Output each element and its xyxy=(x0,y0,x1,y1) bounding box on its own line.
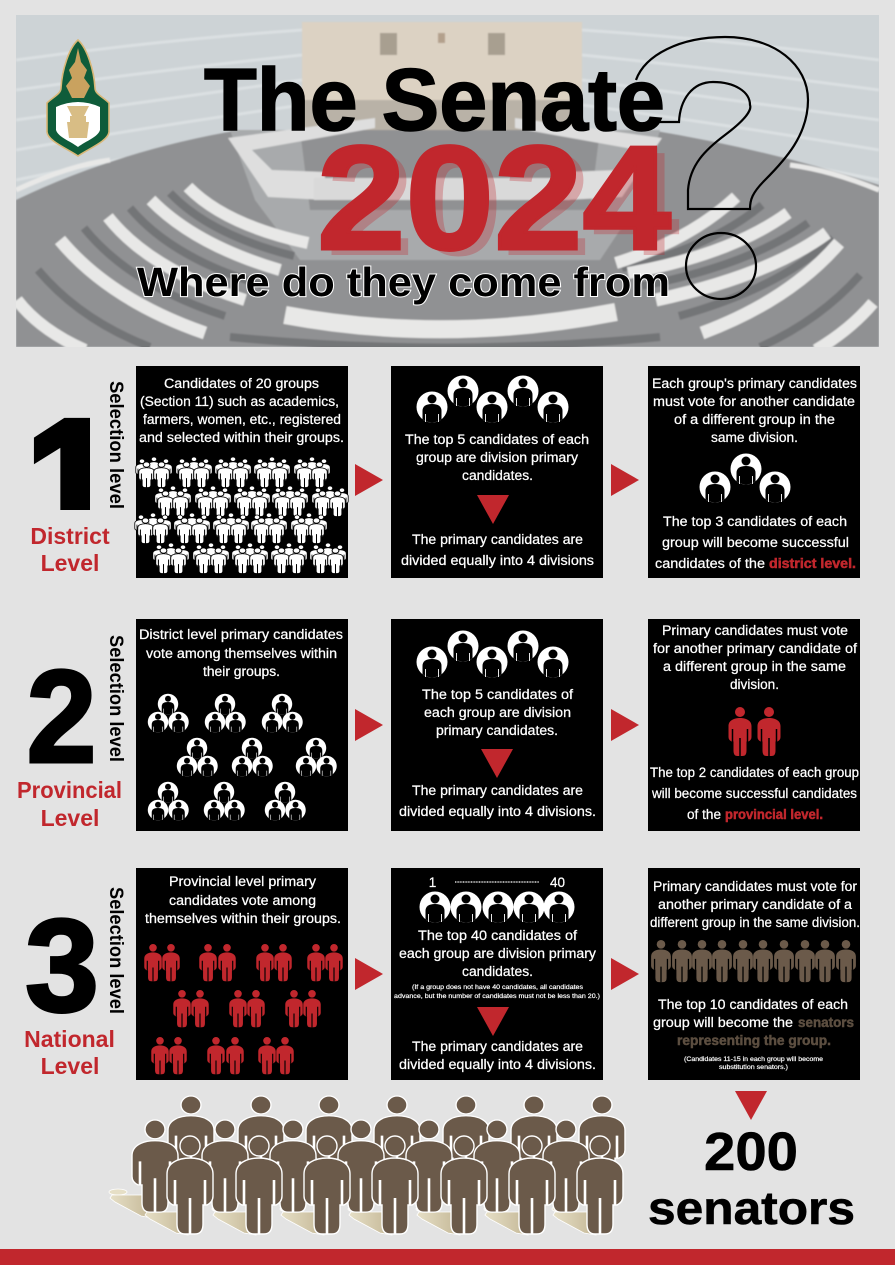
level 2 number: 2 xyxy=(26,643,96,790)
icon: red candidate pairs xyxy=(144,944,343,1074)
icon: ten brown senators xyxy=(651,940,856,982)
panel: provincial result: The top 2 candidates of each group xyxy=(650,765,859,780)
panel: national result: Primary candidates must vote for xyxy=(653,879,858,894)
panel: national result xyxy=(648,868,860,1080)
panel: district top 5: group are division primary xyxy=(416,450,578,465)
arrow xyxy=(611,709,639,741)
panel: provincial top 5 xyxy=(391,619,603,831)
header: parliament chamber photo xyxy=(16,15,879,350)
icon: three candidates xyxy=(700,454,790,503)
panel: district candidates xyxy=(135,366,348,578)
panel: provincial result: division. xyxy=(730,677,779,692)
panel: district candidates: and selected within their groups. xyxy=(139,430,344,445)
panel: national result: substitution senators.) xyxy=(719,1064,788,1071)
panel: national result: (Candidates 11-15 in each group will become xyxy=(684,1056,823,1063)
panel: national top 40 xyxy=(391,868,603,1080)
shadows xyxy=(109,1189,596,1235)
level 2 name: Provincial xyxy=(17,777,122,803)
panel: district top 5: candidates. xyxy=(462,468,533,483)
arrow down xyxy=(477,495,509,524)
icon: triples of candidates xyxy=(148,694,337,820)
subtitle: Where do they come from xyxy=(137,259,670,305)
icon: five candidates xyxy=(416,376,568,423)
panel: national top 40: divided equally into 4 divisions. xyxy=(399,1057,596,1072)
arrow down xyxy=(481,749,513,778)
panel: national result: another primary candidate of a xyxy=(658,897,853,912)
panel: district result: The top 3 candidates of each xyxy=(663,514,847,529)
icon: parliament emblem xyxy=(47,40,109,156)
icon: crowds of candidates xyxy=(135,457,348,573)
panel: provincial top 5: primary candidates. xyxy=(436,723,558,738)
arrow down xyxy=(477,1007,509,1036)
level 1 number: 1 xyxy=(27,387,116,566)
panel: provincial candidates: vote among themselves within xyxy=(146,646,337,661)
arrow xyxy=(611,958,639,990)
arrow xyxy=(611,464,639,496)
panel: provincial result: Primary candidates must vote xyxy=(662,623,848,638)
panel: district candidates: (Section 11) such as academics, xyxy=(140,394,339,409)
panel: national candidates: themselves within their groups. xyxy=(145,911,341,926)
panel: provincial candidates xyxy=(136,619,348,831)
panel: district top 5 xyxy=(391,366,603,578)
panel: provincial result xyxy=(648,619,860,831)
panel: district result: must vote for another candidate xyxy=(653,394,855,409)
front row xyxy=(167,1136,623,1234)
panel: national top 40: advance, but the number of candidates must not be less than 20.) xyxy=(394,993,600,1000)
level 3 name: Level xyxy=(41,1053,99,1079)
total senators label: 200 xyxy=(704,1122,798,1182)
year heading: 2024 xyxy=(326,122,680,287)
back row xyxy=(168,1096,625,1184)
panel: provincial top 5: The primary candidates are xyxy=(412,783,583,798)
panel: national result: different group in the same division. xyxy=(650,915,860,930)
panel: national candidates xyxy=(136,868,348,1080)
panel: national candidates: candidates vote among xyxy=(169,893,316,908)
level 1 name xyxy=(30,523,110,576)
panel: national result: senators xyxy=(798,1015,854,1030)
panel: district top 5: The primary candidates are xyxy=(412,532,583,547)
level 1 name: District xyxy=(30,523,110,549)
panel: national top 40: each group are division primary xyxy=(399,946,596,961)
panel: national top 40: The top 40 candidates of xyxy=(418,928,577,943)
arrow down to total xyxy=(735,1091,767,1120)
panel: district top 5: divided equally into 4 divisions xyxy=(401,553,594,568)
icon: five candidates xyxy=(416,630,568,678)
panel: provincial result: will become successful candidates xyxy=(651,786,857,801)
level 3 side label: Selection level xyxy=(105,887,126,1014)
total senators label: senators xyxy=(648,1182,855,1234)
illustration: crowd of senators xyxy=(109,1096,625,1235)
panel: district result: same division. xyxy=(711,430,798,445)
panel: provincial top 5: each group are division xyxy=(424,705,571,720)
panel: district result xyxy=(648,366,860,578)
level 1 side label: Selection level xyxy=(105,381,126,509)
panel: national top 40: (If a group does not have 40 candidates, all candidates xyxy=(412,984,584,991)
panel: national candidates: Provincial level primary xyxy=(169,874,316,889)
panel: national result: representing the group. xyxy=(677,1033,831,1048)
icon: large question mark outline xyxy=(636,37,808,299)
panel: national result: The top 10 candidates of each xyxy=(658,997,848,1012)
panel: provincial top 5: divided equally into 4 divisions. xyxy=(399,804,596,819)
middle row xyxy=(132,1120,589,1212)
panel: national result: group will become the xyxy=(653,1015,793,1030)
panel: provincial candidates: District level primary candidates xyxy=(139,627,343,642)
panel: provincial candidates: their groups. xyxy=(203,664,280,679)
level 3 number: 3 xyxy=(25,892,99,1039)
arrow xyxy=(355,958,383,990)
level 3 name: National xyxy=(24,1026,115,1052)
panel: provincial top 5: The top 5 candidates of xyxy=(422,687,573,702)
year heading: 2024 xyxy=(317,116,671,281)
panel: district top 5: The top 5 candidates of each xyxy=(405,432,589,447)
arrow xyxy=(355,709,383,741)
panel: district candidates: Candidates of 20 groups xyxy=(164,376,319,391)
panel: national top 40: The primary candidates are xyxy=(412,1039,583,1054)
icon: two red candidates xyxy=(728,707,780,756)
icon: five candidates in a row xyxy=(420,892,574,923)
panel: district result: district level. xyxy=(769,556,856,571)
level 1 name: Level xyxy=(41,550,99,576)
arrow xyxy=(355,464,383,496)
panel: district result: candidates of the xyxy=(655,556,765,571)
panel: national top 40: 1 xyxy=(429,875,436,890)
level 2 side label: Selection level xyxy=(105,635,126,762)
level 2 name xyxy=(17,777,122,831)
panel: national top 40: candidates. xyxy=(462,964,533,979)
panel: district result: Each group's primary candidates xyxy=(652,376,857,391)
level 3 name xyxy=(24,1026,115,1079)
panel: district result: group will become successful xyxy=(662,535,849,550)
total senators label xyxy=(648,1122,855,1234)
panel: provincial result: a different group in the same xyxy=(663,659,846,674)
panel: national top 40: 40 xyxy=(550,875,565,890)
panel: district result: of a different group in the xyxy=(674,412,835,427)
panel: provincial result: for another primary candidate of xyxy=(653,641,857,656)
footer bar xyxy=(0,1249,895,1265)
title: The Senate xyxy=(204,50,665,149)
panel: district candidates: farmers, women, etc., registered xyxy=(143,412,341,427)
panel: provincial result: of the xyxy=(687,807,721,822)
panel: provincial result: provincial level. xyxy=(725,807,823,822)
level 2 name: Level xyxy=(41,805,99,831)
